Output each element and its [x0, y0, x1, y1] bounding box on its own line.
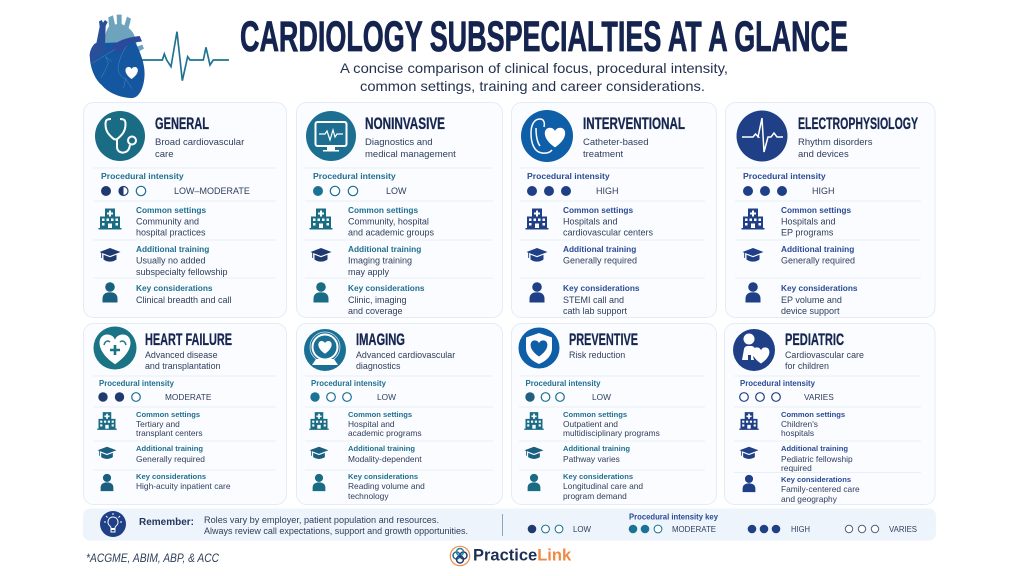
procedural intensity: Procedural intensity — [99, 379, 175, 388]
description — [798, 137, 873, 160]
key: low: LOW — [573, 525, 591, 534]
key considerations: Key considerations — [348, 283, 425, 293]
procedural intensity: MODERATE — [165, 392, 212, 402]
common settings — [98, 205, 206, 238]
key considerations: and coverage — [348, 306, 403, 316]
key: varies: VARIES — [889, 525, 917, 534]
heading: IMAGING — [356, 331, 405, 349]
common settings: Community, hospital — [348, 216, 429, 226]
additional training — [98, 444, 205, 464]
key considerations — [101, 472, 231, 491]
description: medical management — [365, 149, 456, 160]
key considerations — [530, 282, 640, 316]
procedural intensity: Procedural intensity — [311, 379, 387, 388]
icon: rhythm trace — [736, 110, 788, 162]
aorta arch and branches — [104, 15, 137, 50]
common settings: Common settings — [563, 205, 633, 215]
procedural intensity: LOW — [592, 392, 611, 402]
additional training: Pathway varies — [563, 454, 620, 464]
procedural intensity: HIGH — [596, 186, 618, 196]
additional training: Imaging training — [348, 256, 412, 266]
common settings: Common settings — [136, 205, 206, 215]
description: care — [155, 149, 173, 160]
procedural intensity — [740, 379, 834, 402]
illustration: anatomical heart with ECG line — [90, 15, 229, 98]
key considerations: EP volume and — [781, 295, 842, 305]
description: Catheter-based — [583, 137, 648, 148]
common settings — [97, 410, 203, 438]
description: Risk reduction — [569, 350, 625, 360]
key considerations: technology — [348, 491, 389, 501]
description: diagnostics — [356, 361, 401, 371]
description: Diagnostics and — [365, 137, 433, 148]
description: Advanced cardiovascular — [356, 350, 455, 360]
procedural intensity: HIGH — [812, 186, 834, 196]
common settings: EP programs — [781, 228, 834, 238]
additional training: Additional training — [781, 244, 854, 254]
icon: light bulb — [100, 511, 126, 537]
logo mark — [450, 546, 470, 566]
additional training: Additional training — [136, 444, 203, 453]
additional training — [310, 444, 422, 464]
common settings: Common settings — [563, 410, 627, 419]
panel: Pediatric — [724, 324, 935, 504]
right vessel — [135, 45, 144, 53]
procedural intensity: Procedural intensity — [743, 171, 826, 181]
common settings: Common settings — [136, 410, 200, 419]
additional training: Additional training — [348, 244, 421, 254]
key considerations: Clinic, imaging — [348, 295, 407, 305]
key considerations: Reading volume and — [348, 481, 425, 491]
logo: PracticeLink — [450, 546, 572, 566]
intensity key title: Procedural intensity key — [629, 512, 718, 522]
description: for children — [785, 361, 829, 371]
key considerations: Key considerations — [348, 472, 418, 481]
procedural intensity: Procedural intensity — [526, 379, 601, 388]
key considerations: Key considerations — [563, 283, 640, 293]
coronary vessels — [92, 46, 132, 89]
icon: heart with plus — [94, 326, 136, 370]
common settings: Children's — [781, 419, 818, 429]
additional training — [310, 244, 421, 277]
common settings: Common settings — [781, 205, 851, 215]
subtitle: common settings, training and career considerations. — [360, 78, 705, 94]
heading: PREVENTIVE — [569, 331, 638, 349]
key considerations: Key considerations — [781, 475, 851, 484]
additional training: Generally required — [136, 454, 205, 464]
panel: Interventional — [512, 102, 716, 318]
description — [155, 137, 244, 160]
common settings: cardiovascular centers — [563, 228, 654, 238]
procedural intensity — [743, 171, 834, 196]
procedural intensity — [527, 171, 618, 196]
procedural intensity: LOW — [377, 392, 396, 402]
key considerations: and geography — [781, 494, 838, 504]
reminder text — [204, 515, 468, 536]
procedural intensity: LOW — [386, 186, 407, 196]
procedural intensity: VARIES — [804, 392, 834, 402]
pulmonary vein — [96, 20, 108, 47]
white heart — [125, 67, 138, 79]
description — [785, 350, 864, 371]
common settings: Common settings — [781, 410, 845, 419]
description: Rhythm disorders — [798, 137, 873, 148]
common settings: hospitals — [781, 428, 814, 438]
panel: Imaging — [296, 324, 502, 504]
heading: GENERAL — [155, 115, 209, 133]
key considerations: Longitudinal care and — [563, 481, 643, 491]
description — [365, 137, 456, 160]
procedural intensity: Procedural intensity — [740, 379, 816, 388]
additional training: Additional training — [563, 444, 630, 453]
common settings: Hospital and — [348, 419, 395, 429]
logo wordmark: PracticeLink — [473, 546, 572, 564]
key: high: HIGH — [791, 525, 810, 534]
common settings: hospital practices — [136, 228, 206, 238]
key: low — [528, 525, 591, 534]
common settings — [310, 205, 435, 238]
reminder text: Roles vary by employer, patient population and resources. — [204, 515, 439, 525]
key considerations — [746, 282, 858, 316]
common settings: transplant centers — [136, 428, 203, 438]
heart body — [90, 42, 145, 98]
footnote: *ACGME, ABIM, ABP, & ACC — [86, 553, 220, 565]
additional training: Generally required — [781, 256, 855, 266]
common settings: Community and — [136, 216, 199, 226]
additional training — [525, 444, 630, 464]
panel: remember bar and intensity key — [83, 508, 936, 540]
common settings: academic programs — [348, 428, 422, 438]
additional training: Pediatric fellowship — [781, 454, 853, 464]
additional training: Additional training — [781, 444, 848, 453]
key considerations: Family-centered care — [781, 484, 860, 494]
description — [356, 350, 455, 371]
description: Broad cardiovascular — [155, 137, 244, 148]
panel: General — [84, 102, 286, 318]
additional training — [742, 244, 855, 266]
common settings — [739, 410, 845, 438]
additional training — [100, 244, 228, 277]
key considerations: Key considerations — [781, 283, 858, 293]
description: and devices — [798, 149, 849, 160]
description — [583, 137, 648, 160]
description: and transplantation — [145, 361, 221, 371]
subtitle — [340, 60, 728, 94]
pulmonary artery — [109, 36, 142, 53]
heading: NONINVASIVE — [365, 115, 445, 133]
icon: catheter and heart — [521, 110, 573, 162]
procedural intensity: Procedural intensity — [101, 171, 184, 181]
key considerations: High-acuity inpatient care — [136, 481, 231, 491]
common settings: and academic groups — [348, 228, 435, 238]
subtitle: A concise comparison of clinical focus, procedural intensity, — [340, 60, 728, 76]
key considerations: STEMI call and — [563, 295, 624, 305]
panel: Heart Failure — [84, 324, 286, 504]
procedural intensity — [525, 379, 611, 402]
procedural intensity: Procedural intensity — [313, 171, 396, 181]
reminder label: Remember: — [139, 517, 194, 528]
heading: ELECTROPHYSIOLOGY — [798, 115, 918, 133]
key considerations — [743, 475, 860, 504]
key considerations: Clinical breadth and call — [136, 295, 232, 305]
key: moderate: MODERATE — [672, 525, 716, 534]
key considerations: program demand — [563, 491, 627, 501]
description: Advanced disease — [145, 350, 218, 360]
key considerations: Key considerations — [136, 283, 213, 293]
key considerations — [314, 282, 425, 316]
additional training: Additional training — [136, 244, 209, 254]
reminder text: Always review call expectations, support and growth opportunities. — [204, 526, 468, 536]
common settings — [526, 205, 654, 238]
key considerations: device support — [781, 306, 840, 316]
description: Cardiovascular care — [785, 350, 864, 360]
key considerations — [102, 282, 232, 305]
additional training: Usually no added — [136, 256, 206, 266]
key considerations: Key considerations — [563, 472, 633, 481]
additional training: Modality-dependent — [348, 454, 422, 464]
key considerations: cath lab support — [563, 306, 628, 316]
heading: PEDIATRIC — [785, 331, 844, 349]
procedural intensity: Procedural intensity — [527, 171, 610, 181]
additional training: Additional training — [348, 444, 415, 453]
panel: Noninvasive — [296, 102, 502, 318]
description: treatment — [583, 149, 623, 160]
heading: HEART FAILURE — [145, 331, 232, 349]
panel: Electrophysiology — [726, 102, 935, 318]
common settings: Common settings — [348, 205, 418, 215]
heading: INTERVENTIONAL — [583, 115, 685, 133]
common settings: Common settings — [348, 410, 412, 419]
procedural intensity: LOW–MODERATE — [174, 186, 250, 196]
additional training: Generally required — [563, 256, 637, 266]
common settings — [524, 410, 660, 438]
additional training: Additional training — [563, 244, 636, 254]
key considerations — [313, 472, 425, 501]
key considerations — [528, 472, 643, 501]
icon: scanner — [304, 329, 346, 371]
icon: child with heart — [733, 329, 775, 371]
ECG trace — [140, 32, 229, 81]
common settings: Hospitals and — [781, 216, 836, 226]
description — [145, 350, 221, 371]
icon: monitor — [306, 111, 356, 161]
additional training: required — [781, 463, 812, 473]
common settings — [742, 205, 851, 238]
additional training — [526, 244, 637, 266]
common settings: Hospitals and — [563, 216, 618, 226]
additional training: may apply — [348, 267, 390, 277]
common settings — [309, 410, 422, 438]
procedural intensity — [98, 379, 212, 402]
procedural intensity — [101, 171, 250, 196]
additional training: subspecialty fellowship — [136, 267, 228, 277]
common settings: Outpatient and — [563, 419, 618, 429]
common settings: multidisciplinary programs — [563, 428, 660, 438]
key: moderate — [629, 525, 716, 534]
panel: Preventive — [512, 324, 716, 504]
key: high — [748, 525, 810, 534]
icon: shield with heart — [518, 328, 560, 368]
right atrium — [90, 42, 108, 64]
key considerations: Key considerations — [136, 472, 206, 481]
icon: stethoscope — [95, 111, 145, 161]
procedural intensity — [310, 379, 396, 402]
common settings: Tertiary and — [136, 419, 180, 429]
procedural intensity — [313, 171, 407, 196]
key: varies — [845, 525, 917, 534]
additional training — [740, 444, 853, 473]
